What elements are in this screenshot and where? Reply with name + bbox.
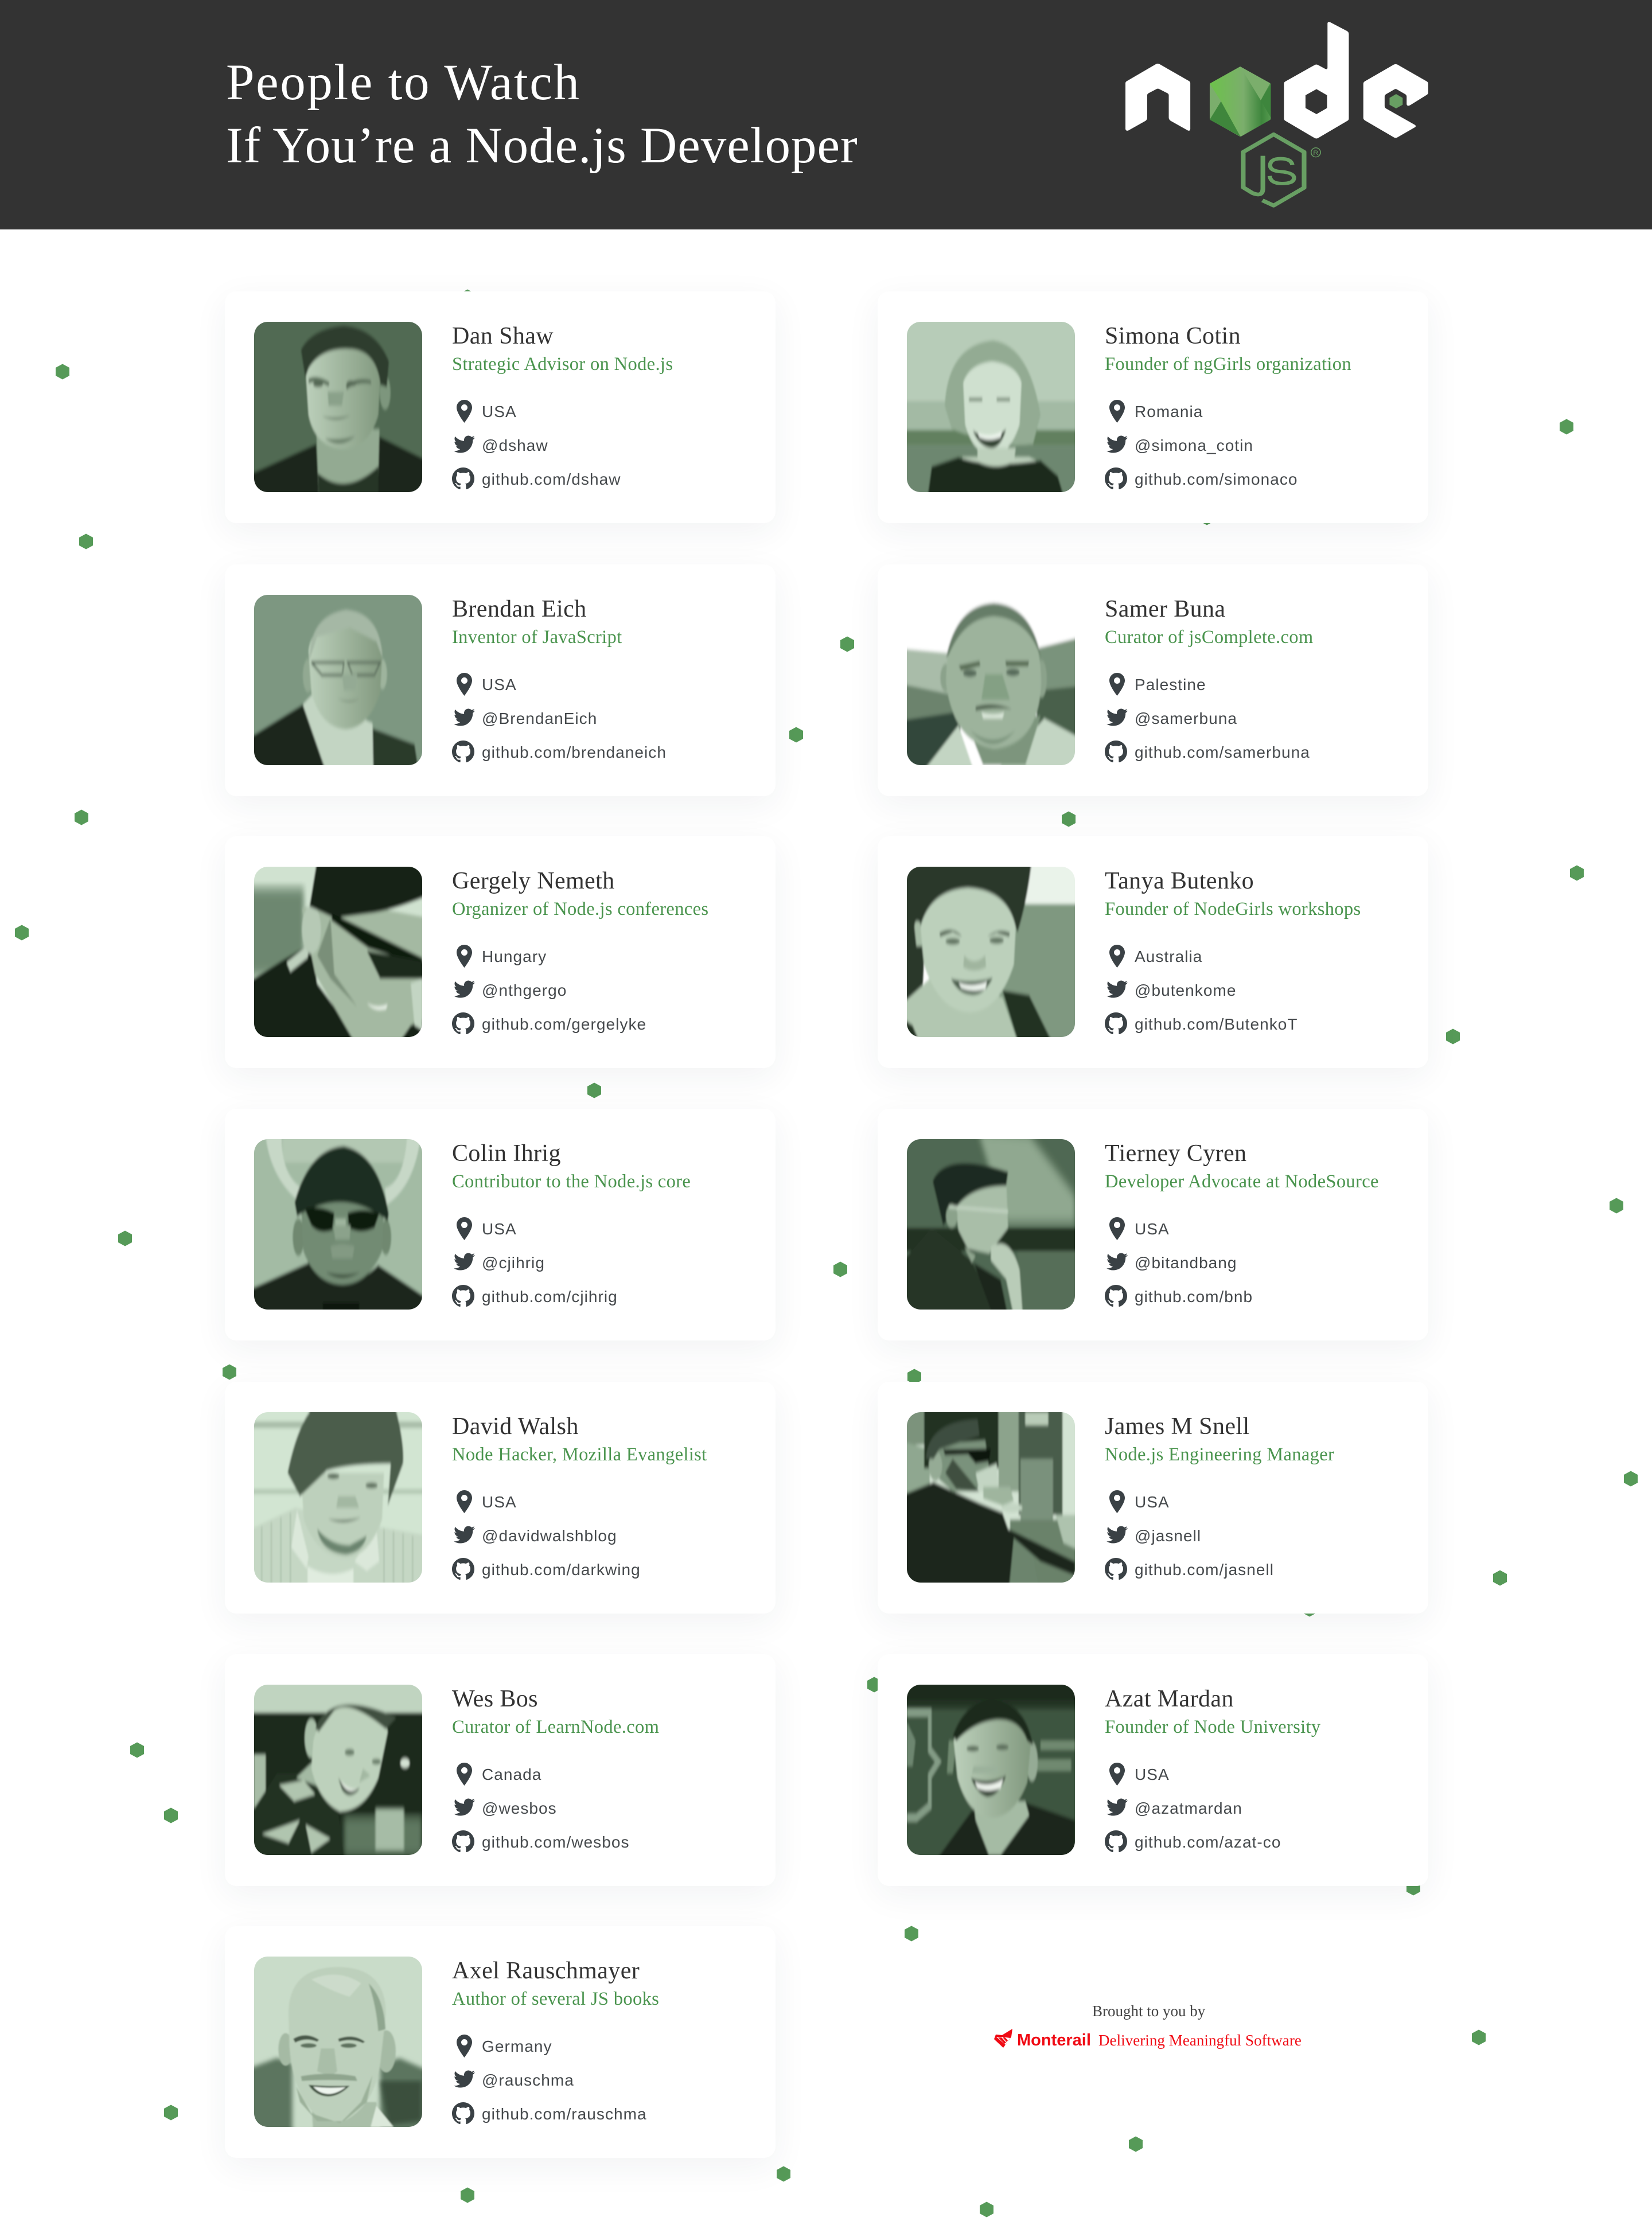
twitter: @rauschma	[482, 2071, 574, 2089]
photo: James M Snell	[907, 1412, 1075, 1583]
panel: Simona Cotin	[878, 291, 1428, 523]
location: Australia	[1135, 948, 1202, 965]
twitter	[1105, 1252, 1237, 1275]
location	[1109, 945, 1202, 968]
photo: Wes Bos	[254, 1685, 422, 1855]
twitter: @dshaw	[482, 437, 548, 454]
role: Node Hacker, Mozilla Evangelist	[452, 1444, 707, 1465]
github: github.com/gergelyke	[482, 1015, 646, 1033]
role: Node.js Engineering Manager	[1105, 1444, 1334, 1465]
github	[452, 1285, 618, 1308]
photo: Dan Shaw	[254, 322, 422, 492]
panel: Tierney Cyren	[878, 1109, 1428, 1340]
location	[452, 2035, 552, 2058]
location: Romania	[1135, 403, 1203, 420]
photo: Azat Mardan	[907, 1685, 1075, 1855]
location	[457, 400, 517, 423]
brand name: Monterail	[1017, 2031, 1091, 2049]
name: Axel Rauschmayer	[452, 1958, 640, 1984]
github	[452, 2103, 647, 2126]
location: USA	[1135, 1220, 1170, 1238]
panel: James M Snell	[878, 1382, 1428, 1614]
github: github.com/rauschma	[482, 2105, 647, 2123]
location	[452, 1218, 517, 1241]
location: USA	[482, 1220, 517, 1238]
github: github.com/dshaw	[482, 470, 621, 488]
github	[1105, 1285, 1253, 1308]
location: Hungary	[482, 948, 547, 965]
github	[1105, 741, 1310, 762]
twitter: @bitandbang	[1135, 1254, 1237, 1272]
role: Contributor to the Node.js core	[452, 1171, 691, 1192]
github	[1105, 1831, 1281, 1854]
photo: Colin Ihrig	[254, 1139, 422, 1310]
name: Gergely Nemeth	[452, 868, 615, 894]
tagline: Delivering Meaningful Software	[1098, 2032, 1302, 2049]
github	[452, 1012, 646, 1034]
github: github.com/simonaco	[1135, 470, 1298, 488]
role: Inventor of JavaScript	[452, 627, 622, 648]
panel: Gergely Nemeth	[225, 836, 776, 1068]
twitter	[452, 1797, 557, 1820]
role: Founder of Node University	[1105, 1717, 1320, 1737]
twitter	[1105, 1797, 1242, 1820]
name: Tierney Cyren	[1105, 1140, 1246, 1167]
twitter: @samerbuna	[1135, 710, 1237, 727]
name: Brendan Eich	[452, 596, 587, 622]
name: Samer Buna	[1105, 596, 1225, 622]
github	[452, 1558, 641, 1581]
name: David Walsh	[452, 1413, 579, 1440]
location	[452, 1491, 517, 1514]
role: Author of several JS books	[452, 1989, 659, 2009]
location	[452, 1763, 541, 1786]
github	[1105, 467, 1298, 489]
github: github.com/ButenkoT	[1135, 1015, 1298, 1033]
name: Dan Shaw	[452, 323, 554, 349]
twitter	[452, 2069, 574, 2092]
name: Wes Bos	[452, 1686, 538, 1712]
location: USA	[482, 676, 517, 693]
location: USA	[1135, 1493, 1170, 1511]
location	[1105, 1491, 1170, 1514]
photo: Simona Cotin	[907, 322, 1075, 492]
github: github.com/samerbuna	[1135, 743, 1310, 761]
title: If You’re a Node.js Developer	[226, 118, 858, 174]
github	[1105, 1013, 1298, 1036]
icon: Node.js logo	[1125, 22, 1428, 208]
github: github.com/jasnell	[1135, 1561, 1274, 1579]
github: github.com/wesbos	[482, 1833, 630, 1851]
panel: David Walsh	[225, 1382, 776, 1614]
location: USA	[482, 1493, 517, 1511]
location	[1109, 400, 1203, 423]
panel: Wes Bos	[225, 1654, 776, 1886]
twitter: @jasnell	[1135, 1527, 1201, 1545]
github: github.com/azat-co	[1135, 1833, 1281, 1851]
role: Founder of ngGirls organization	[1105, 354, 1351, 375]
location: Germany	[482, 2037, 552, 2055]
twitter	[1105, 1525, 1201, 1548]
name: Colin Ihrig	[452, 1140, 561, 1167]
location	[457, 673, 517, 696]
name: Simona Cotin	[1105, 323, 1241, 349]
twitter	[452, 1252, 545, 1275]
twitter: @wesbos	[482, 1799, 557, 1817]
panel: Colin Ihrig	[225, 1109, 776, 1340]
twitter: @nthgergo	[482, 981, 567, 999]
location: USA	[482, 403, 517, 420]
twitter: @davidwalshblog	[482, 1527, 617, 1545]
icon: Node.js logo: R	[1313, 149, 1319, 157]
photo: Brendan Eich	[254, 595, 422, 765]
photo: Tierney Cyren	[907, 1139, 1075, 1310]
twitter: @butenkome	[1135, 981, 1236, 999]
twitter: @simona_cotin	[1135, 437, 1253, 454]
location	[1105, 1218, 1170, 1241]
photo: Gergely Nemeth	[254, 867, 422, 1037]
credit: brought to you by: Brought to you by	[1092, 2002, 1205, 2020]
role: Curator of LearnNode.com	[452, 1717, 659, 1737]
github	[452, 1831, 630, 1854]
panel: Tanya Butenko	[878, 836, 1428, 1068]
photo: Tanya Butenko	[907, 867, 1075, 1037]
github: github.com/brendaneich	[482, 743, 667, 761]
name: Azat Mardan	[1105, 1686, 1234, 1712]
location	[1109, 673, 1206, 696]
location	[457, 945, 547, 968]
panel: Azat Mardan	[878, 1654, 1428, 1886]
github: github.com/darkwing	[482, 1561, 641, 1579]
github: github.com/cjihrig	[482, 1288, 618, 1306]
role: Developer Advocate at NodeSource	[1105, 1171, 1379, 1192]
twitter: @azatmardan	[1135, 1799, 1242, 1817]
twitter	[454, 436, 548, 454]
twitter	[452, 1525, 617, 1548]
panel: Brendan Eich	[225, 564, 776, 796]
icon: Monterail logo	[994, 2029, 1012, 2048]
location: Canada	[482, 1766, 541, 1783]
github: github.com/bnb	[1135, 1288, 1253, 1306]
panel: Dan Shaw	[225, 291, 776, 523]
photo: Axel Rauschmayer	[254, 1957, 422, 2127]
title: People to Watch	[226, 54, 580, 111]
twitter: @BrendanEich	[482, 710, 597, 727]
role: Strategic Advisor on Node.js	[452, 354, 673, 375]
twitter: @cjihrig	[482, 1254, 545, 1272]
panel: Axel Rauschmayer	[225, 1926, 776, 2158]
location	[1105, 1763, 1170, 1786]
location: USA	[1135, 1766, 1170, 1783]
role: Founder of NodeGirls workshops	[1105, 899, 1361, 919]
title	[226, 54, 858, 174]
github	[452, 467, 621, 489]
photo: Samer Buna	[907, 601, 1075, 765]
header band	[0, 0, 1652, 229]
photo: David Walsh	[254, 1412, 422, 1583]
name: James M Snell	[1105, 1413, 1250, 1440]
role: Curator of jsComplete.com	[1105, 627, 1313, 648]
github	[1105, 1558, 1274, 1581]
role: Organizer of Node.js conferences	[452, 899, 708, 919]
location: Palestine	[1135, 676, 1206, 693]
name: Tanya Butenko	[1105, 868, 1254, 894]
panel: Samer Buna	[878, 564, 1428, 796]
